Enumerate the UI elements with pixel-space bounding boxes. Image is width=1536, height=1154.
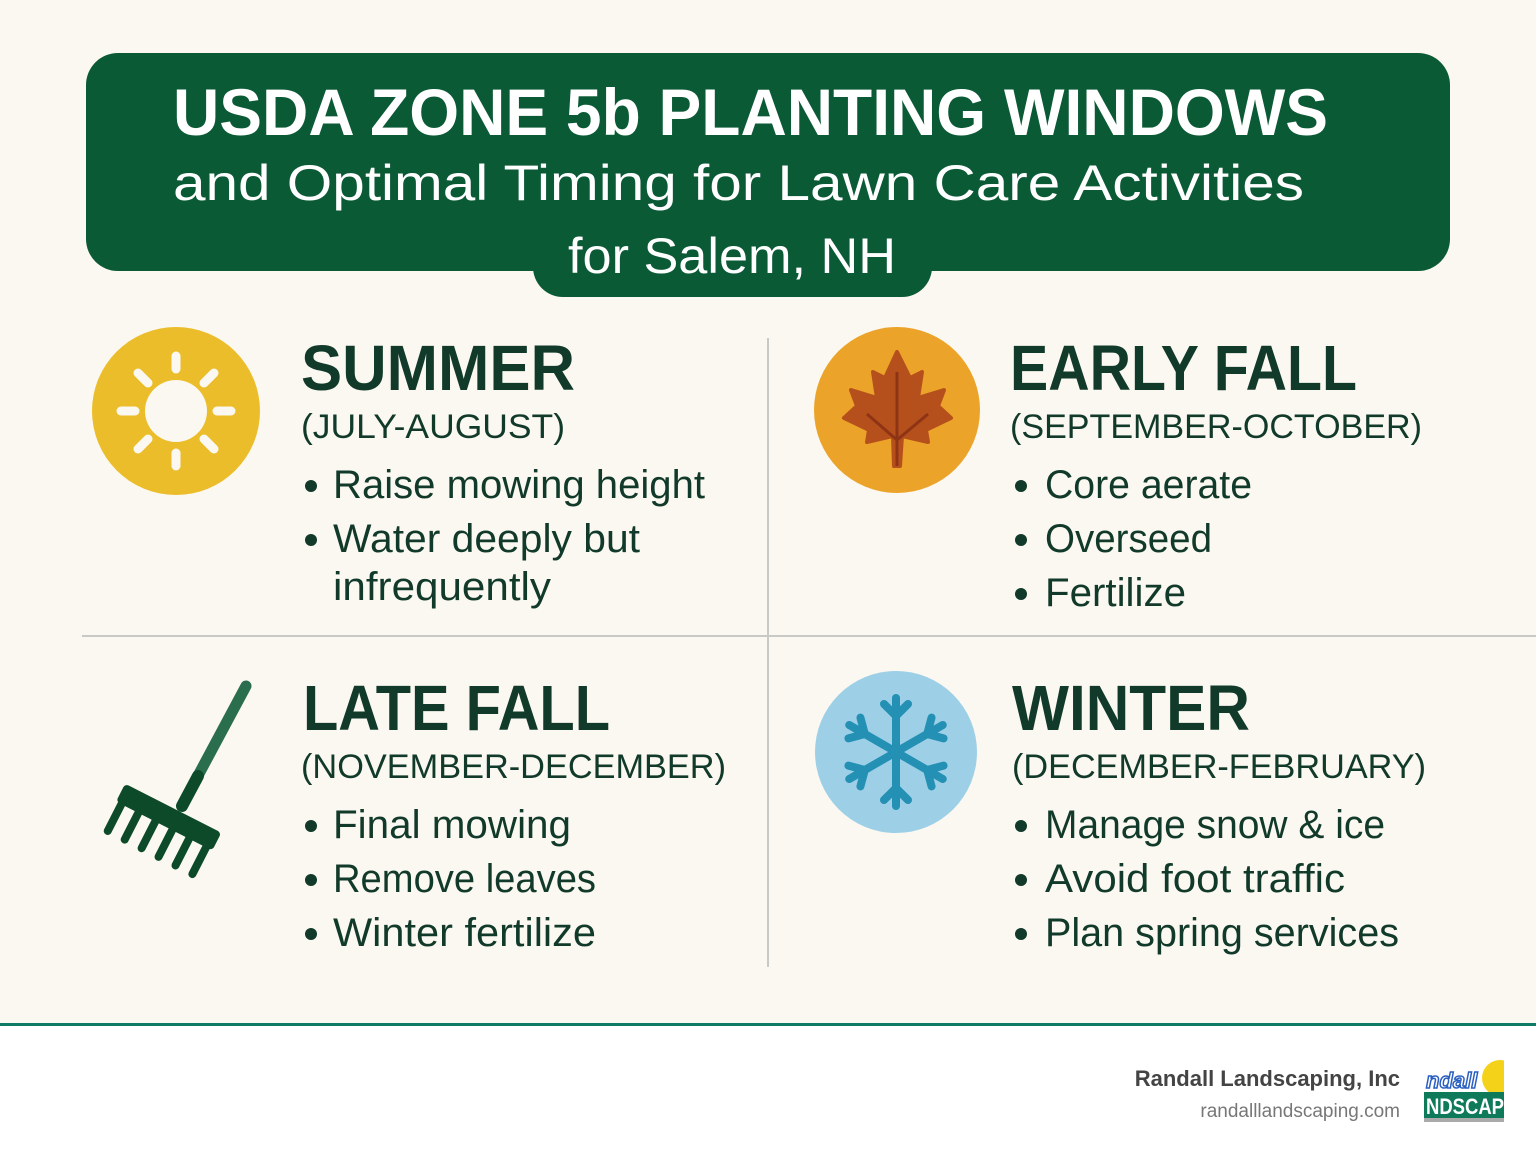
location: for Salem, NH — [568, 228, 896, 284]
icon: sun — [92, 327, 260, 495]
panel: winter: Manage snow & ice — [1045, 803, 1385, 847]
panel: late fall — [102, 672, 726, 955]
panel: early fall: Fertilize — [1045, 571, 1186, 615]
header banner — [86, 53, 1450, 297]
logo: ndall — [1426, 1068, 1478, 1093]
panel: winter: Plan spring services — [1045, 911, 1399, 955]
panel: early fall: Overseed — [1045, 517, 1212, 561]
panel: late fall: Remove leaves — [333, 857, 596, 901]
panel: summer — [92, 327, 705, 609]
panel: summer: SUMMER — [301, 332, 575, 404]
logo: NDSCAP — [1426, 1094, 1504, 1119]
panel: late fall: Winter fertilize — [333, 911, 596, 955]
footer — [0, 1023, 1536, 1154]
panel: late fall: Final mowing — [333, 803, 571, 847]
panel: winter — [815, 671, 1426, 955]
icon: snowflake — [815, 671, 977, 833]
panel: summer: infrequently — [333, 565, 551, 609]
panel: winter: (DECEMBER-FEBRUARY) — [1012, 748, 1426, 786]
panel: early fall — [814, 327, 1422, 615]
title: USDA ZONE 5b PLANTING WINDOWS — [173, 75, 1328, 149]
panel: early fall: Core aerate — [1045, 463, 1252, 507]
panel: early fall: EARLY FALL — [1010, 332, 1357, 404]
icon: leaf — [814, 327, 980, 493]
panel: early fall: (SEPTEMBER-OCTOBER) — [1010, 408, 1422, 446]
icon: rake — [102, 686, 246, 877]
panel: summer: (JULY-AUGUST) — [301, 408, 565, 446]
company name: Randall Landscaping, Inc — [1135, 1066, 1400, 1091]
panel: winter: Avoid foot traffic — [1045, 857, 1345, 901]
website: randalllandscaping.com — [1200, 1101, 1400, 1122]
panel: summer: Raise mowing height — [333, 463, 705, 507]
panel: winter: WINTER — [1012, 672, 1250, 744]
panel: late fall: (NOVEMBER-DECEMBER) — [301, 748, 726, 786]
panel: summer: Water deeply but — [333, 517, 640, 561]
panel: late fall: LATE FALL — [303, 672, 610, 744]
logo — [1424, 1060, 1504, 1122]
subtitle: and Optimal Timing for Lawn Care Activities — [173, 155, 1304, 211]
